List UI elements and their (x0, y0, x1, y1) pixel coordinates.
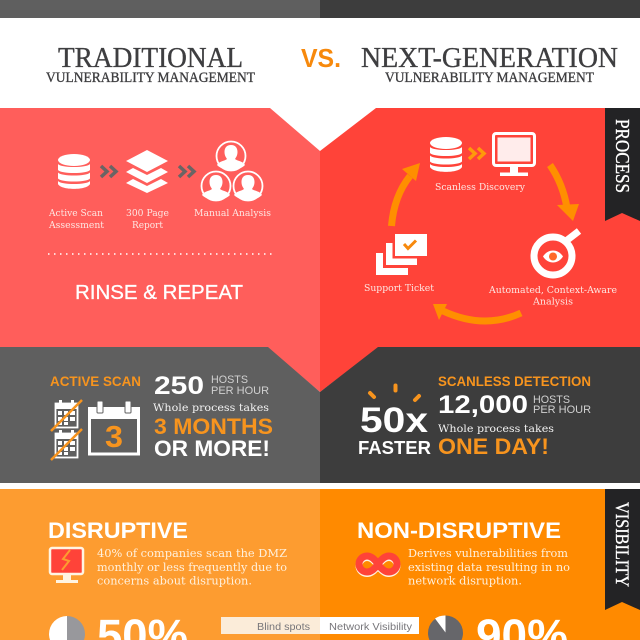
text: disruptive description: 40% of companies scan the DMZ (97, 547, 287, 560)
heading: non-disruptive: NON-DISRUPTIVE (357, 518, 561, 543)
icon: grey chevrons (179, 166, 194, 177)
text: disruptive description (97, 547, 287, 588)
top band: right (320, 0, 640, 18)
title: traditional: VULNERABILITY MANAGEMENT (46, 70, 255, 86)
stat: 12,000 hosts per hour: HOSTS (533, 394, 570, 406)
label: support ticket: Support Ticket (364, 284, 434, 294)
panel: non-disruptive visibility (320, 489, 640, 640)
arrow: ticket to discovery (392, 163, 420, 226)
stat: 250 hosts per hour: HOSTS (211, 374, 248, 386)
icon: grey chevrons (101, 166, 116, 177)
ribbon: process (605, 108, 640, 221)
text: one day: ONE DAY! (438, 434, 549, 459)
icon: three month calendar: 3 (105, 419, 123, 454)
title: traditional (46, 43, 255, 86)
label: automated context-aware analysis (488, 286, 617, 308)
arrow: discovery to analysis (550, 165, 579, 221)
text: whole process takes: Whole process takes (153, 402, 269, 414)
icon: crossed out small calendars (51, 400, 82, 460)
title: next-generation: NEXT-GENERATION (361, 43, 618, 74)
text: active scan: ACTIVE SCAN (50, 374, 141, 389)
label: 300 page report: Report (132, 221, 163, 231)
icon: burst rays (370, 386, 419, 400)
stat: 250 hosts per hour (154, 372, 269, 400)
icon: monitor (494, 134, 534, 176)
panel: disruptive visibility (0, 489, 320, 640)
top band: left (0, 0, 320, 18)
label: 300 page report: 300 Page (126, 209, 169, 219)
ribbon: process: PROCESS (611, 119, 633, 193)
icon: broken monitor (50, 548, 83, 583)
stat: 250 hosts per hour: PER HOUR (211, 385, 269, 397)
text: non-disruptive description: network disruption. (408, 574, 522, 588)
icon: people (202, 142, 262, 200)
icon: infinity (359, 556, 397, 574)
chart: 50 percent pie (49, 616, 85, 640)
legend: blind spots (221, 617, 320, 634)
label: active scan assessment: Assessment (48, 221, 104, 231)
title: traditional: TRADITIONAL (58, 43, 243, 74)
icon: eye magnifier (534, 231, 579, 275)
text: non-disruptive description: Derives vulnerabilities from (408, 547, 569, 560)
label: 300 page report (126, 209, 169, 231)
stat: 50x faster (358, 401, 431, 458)
text: 3 months or more: 3 MONTHS (154, 414, 273, 439)
icon: orange chevrons (469, 148, 484, 159)
label: manual analysis: Manual Analysis (194, 209, 271, 219)
panel: traditional process (0, 108, 320, 392)
icon: stacked pages (126, 150, 168, 193)
title: next-generation: VULNERABILITY MANAGEMENT (385, 70, 594, 86)
panel: active scan stats (0, 347, 320, 483)
text: non-disruptive description: existing data resulting in no (408, 561, 570, 574)
stat: 12,000 hosts per hour: PER HOUR (533, 404, 591, 416)
text: 3 months or more (154, 414, 273, 461)
text: whole process takes: Whole process takes (438, 423, 554, 435)
legend: network visibility (320, 617, 419, 634)
title: versus: VS. (301, 43, 341, 73)
ribbon: visibility (605, 489, 640, 610)
stat: 12,000 hosts per hour (438, 391, 591, 419)
icon: database (430, 137, 462, 172)
text: scanless detection: SCANLESS DETECTION (438, 374, 591, 389)
label: scanless discovery: Scanless Discovery (435, 183, 526, 193)
stat: 12,000 hosts per hour: 12,000 (438, 391, 528, 419)
heading: rinse and repeat: RINSE & REPEAT (75, 282, 243, 304)
panel: next-generation process (320, 108, 640, 392)
heading: disruptive: DISRUPTIVE (48, 518, 188, 543)
icon: database (58, 154, 90, 189)
stat: 50x faster: 50x (360, 401, 429, 440)
legend: blind spots: Blind spots (257, 622, 310, 633)
text: disruptive description: monthly or less frequently due to (97, 561, 287, 574)
stat: 250 hosts per hour: 250 (154, 372, 204, 400)
text: 3 months or more: OR MORE! (154, 436, 270, 461)
text: non-disruptive description (408, 547, 570, 588)
chart: 90 percent pie (428, 615, 463, 640)
panel: scanless detection stats (320, 347, 640, 483)
ribbon: visibility: VISIBILITY (611, 502, 632, 587)
stat: 50x faster: FASTER (358, 438, 431, 458)
arrow: analysis to ticket (433, 304, 521, 321)
text: disruptive description: concerns about disruption. (97, 574, 252, 588)
label: automated context-aware analysis: Analysis (532, 298, 573, 308)
legend: network visibility: Network Visibility (329, 622, 412, 633)
icon: support ticket (376, 234, 427, 275)
label: automated context-aware analysis: Automated, Context-Aware (488, 286, 617, 296)
label: active scan assessment (48, 209, 104, 231)
icon: three month calendar (88, 401, 140, 454)
label: active scan assessment: Active Scan (48, 209, 103, 219)
